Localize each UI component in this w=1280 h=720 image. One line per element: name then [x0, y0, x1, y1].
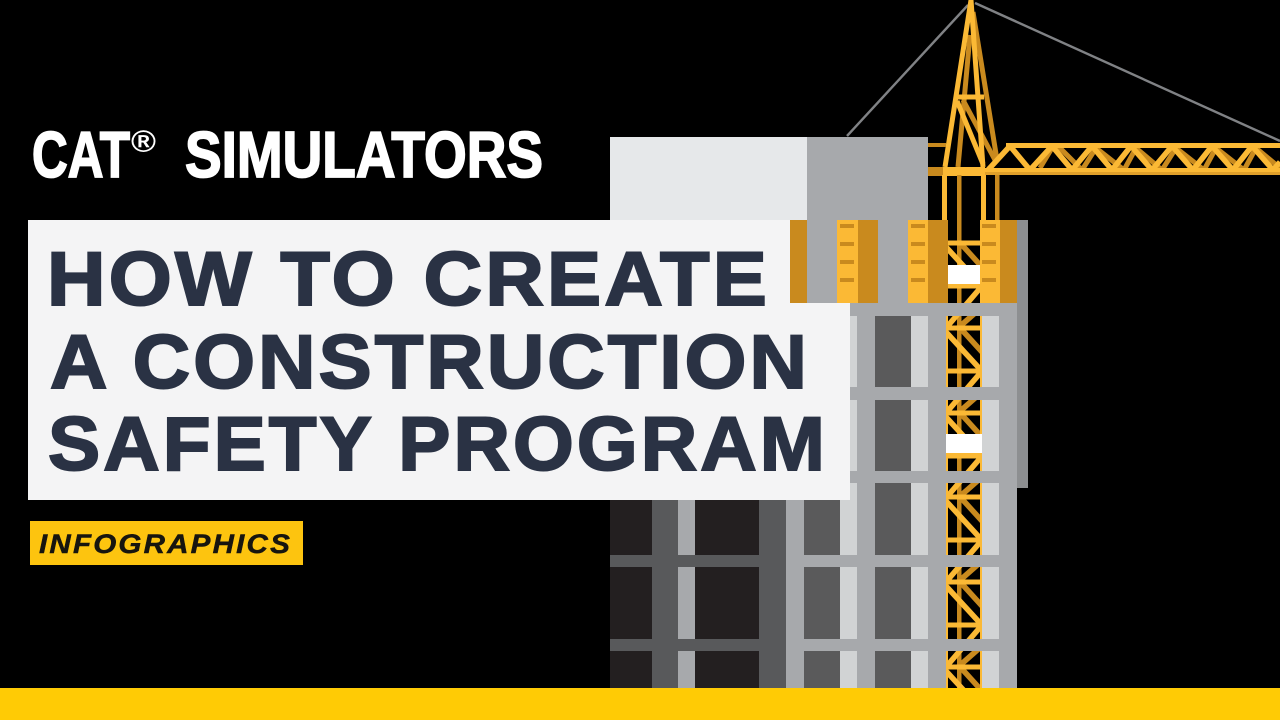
- title text: HOW TO CREATE: [47, 237, 770, 322]
- building: [610, 137, 1028, 720]
- brand heading: CAT: [32, 118, 130, 191]
- crane lattice through building: [946, 240, 982, 720]
- title text: [47, 237, 828, 487]
- formwork columns: [790, 220, 1017, 303]
- right shadow strip: [1017, 220, 1028, 488]
- title text: A CONSTRUCTION: [50, 320, 810, 405]
- title panel: [28, 220, 850, 500]
- crane mast top: [945, 0, 997, 167]
- brand heading: SIMULATORS: [185, 118, 543, 191]
- crane mast lower legs: [942, 175, 1000, 243]
- brand heading: [32, 118, 543, 191]
- lower building left dark side: [610, 490, 786, 688]
- crane: [847, 0, 1280, 243]
- bottom yellow bar: [0, 688, 1280, 720]
- crane jib: [928, 143, 1280, 176]
- category tag: INFOGRAPHICS: [39, 529, 292, 559]
- brand heading: ®: [131, 124, 156, 159]
- category tag: [30, 521, 303, 565]
- crane cables: [847, 3, 1280, 141]
- title text: SAFETY PROGRAM: [48, 402, 828, 487]
- top block: [610, 137, 928, 307]
- lower building right side: [786, 303, 1017, 688]
